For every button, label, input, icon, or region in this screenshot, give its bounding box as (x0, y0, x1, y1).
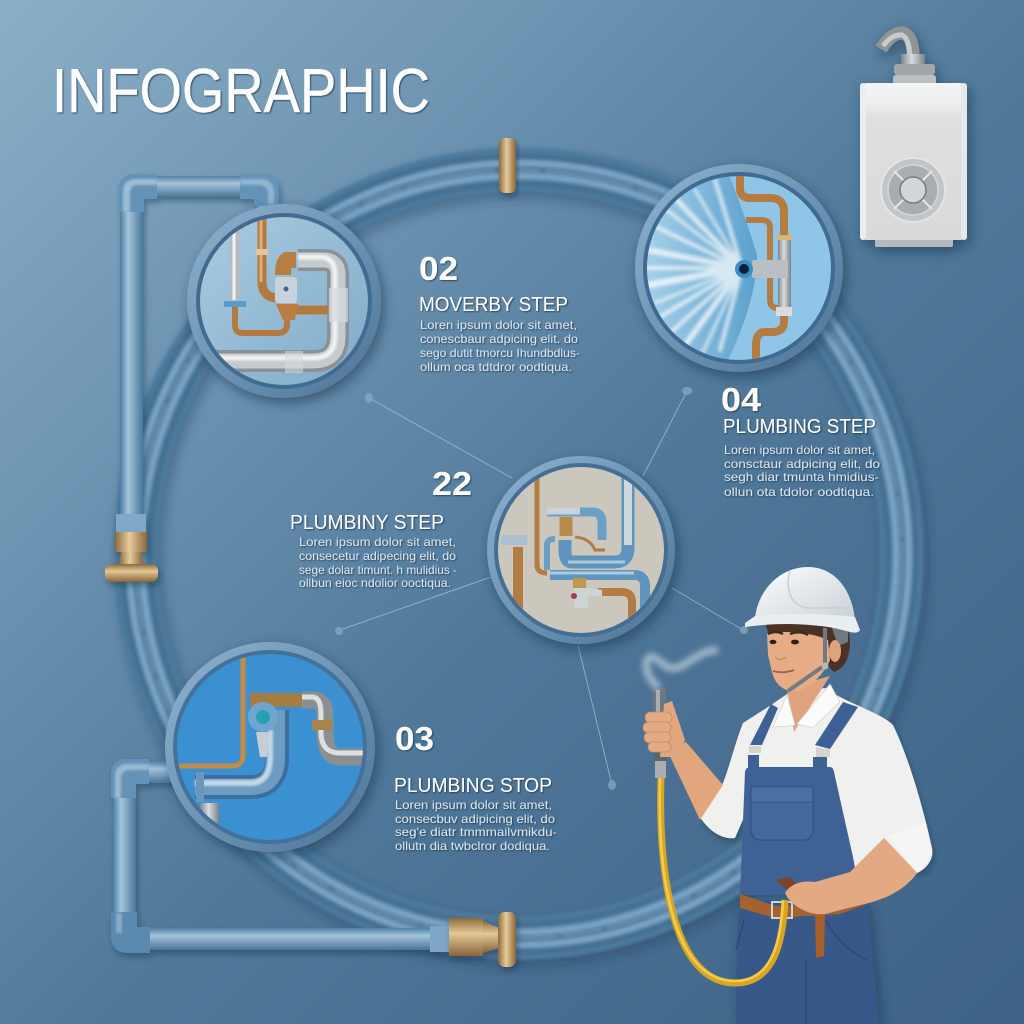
trousers (736, 900, 878, 1024)
right forearm and hand (785, 838, 917, 914)
text block: step 02: ollum oca tdtdror oodtiqua. (420, 360, 572, 374)
ear (829, 640, 841, 662)
circle: step 03 blue plumbing (165, 642, 375, 852)
text block: step 22: Loren ipsum dolor sit amet, (299, 535, 456, 549)
eyebrows and eyes and mouth (768, 632, 808, 672)
text block: step 22: PLUMBINY STEP (290, 512, 444, 534)
text block: step 22: ollbun eioc ndolior ooctiqua. (299, 576, 451, 590)
circle: step 22 plumbing wall detail (487, 456, 675, 644)
belt buckle (772, 902, 792, 918)
sleeve cuff right (887, 822, 932, 873)
water spray fan (647, 176, 757, 360)
text block: step 03 (394, 720, 557, 853)
large ring hose pipe (122, 156, 916, 952)
helmet strap back (832, 628, 848, 646)
pocket (751, 787, 813, 840)
text block: step 02: sego dutit tmorcu Ihundbdlus- (420, 346, 580, 360)
hard hat (745, 567, 860, 633)
upper left blue pipe (116, 174, 279, 534)
text block: step 22: sege dolar timunt. h mulidius - (299, 563, 457, 577)
trouser seams (736, 920, 866, 1024)
neck (787, 676, 830, 732)
text block: step 04 (721, 381, 880, 499)
copper and steel T fitting (735, 175, 792, 362)
strap clip (822, 662, 828, 670)
connector lines and dots (335, 387, 748, 790)
text block: step 02: Loren ipsum dolor sit amet, (420, 318, 577, 332)
text block: step 03: ollutn dia twbclror dodiqua. (395, 839, 550, 853)
belt (740, 893, 867, 918)
text block: step 22 (290, 465, 472, 590)
strap buckles (749, 746, 830, 757)
text block: step 02: conescbaur adpicing elit. do (420, 332, 578, 346)
spout (881, 33, 913, 56)
text block: step 04: segh diar tmunta hmidius- (724, 470, 879, 484)
text block: step 22: consecetur adipecing elit, do (299, 549, 456, 563)
collar (773, 684, 840, 728)
lower left blue pipe (111, 759, 450, 953)
yellow hose (660, 778, 785, 983)
text block: step 02: 02 (419, 250, 458, 287)
text block: step 02: MOVERBY STEP (419, 294, 568, 316)
text block: step 04: consctaur adpicing elit, do (724, 457, 880, 471)
brass coupling bottom (449, 912, 516, 967)
worker figure (643, 567, 932, 1024)
hand gripping nozzle (643, 701, 685, 757)
circle: step 04 water spray (635, 164, 843, 372)
text block: step 03: Loren ipsum dolor sit amet, (395, 798, 552, 812)
top brass ring clamp (499, 138, 516, 193)
hair (765, 622, 850, 672)
text block: step 04: 04 (721, 381, 762, 418)
title: INFOGRAPHIC (52, 57, 430, 126)
text block: step 03: seg'e diatr tmmmailvmikdu- (395, 825, 557, 839)
nozzle (653, 688, 666, 778)
text block: step 03: consecbuv adipicing elit, do (395, 812, 555, 826)
text block: step 04: ollun ota tdolor oodtiqua. (724, 485, 874, 499)
control dial (881, 158, 945, 222)
face (767, 632, 830, 691)
left forearm (668, 742, 723, 820)
text block: step 02 (419, 250, 580, 374)
text block: step 04: Loren ipsum dolor sit amet, (724, 443, 875, 457)
steam (646, 650, 718, 688)
wrench handle (776, 877, 800, 892)
text block: step 22: 22 (432, 465, 472, 502)
text block: step 04: PLUMBING STEP (723, 416, 876, 438)
brass flange fitting left (105, 532, 158, 582)
text block: step 03: PLUMBING STOP (394, 775, 552, 797)
chin strap (788, 628, 825, 691)
text block: step 03: 03 (395, 720, 434, 757)
bib (740, 767, 860, 895)
belt tail (815, 913, 825, 958)
shirt (700, 688, 932, 892)
straps (748, 702, 858, 771)
water heater (860, 33, 967, 247)
circle: step 02 plumbing detail (187, 204, 381, 398)
